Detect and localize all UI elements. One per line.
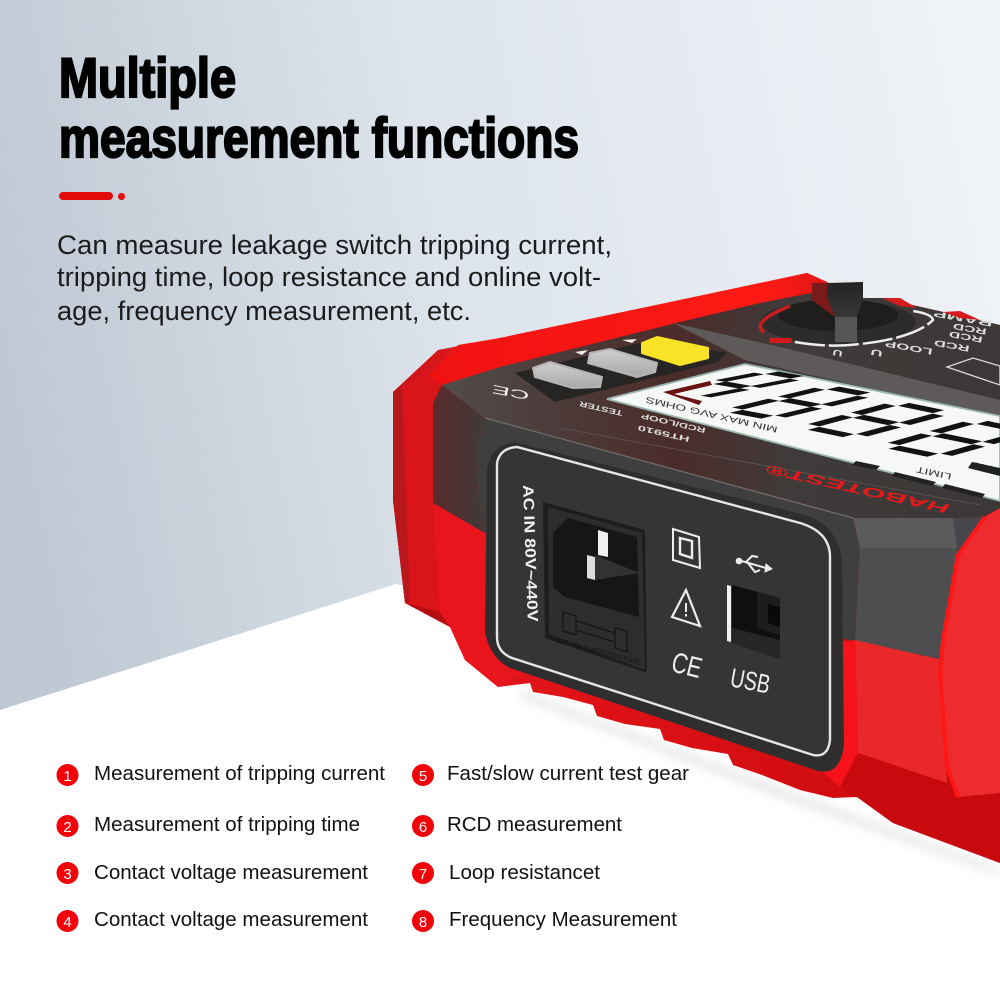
list labels: Loop resistancet (449, 861, 600, 884)
description text (57, 230, 612, 326)
product: multifunction tester device (393, 273, 1000, 875)
list labels: Contact voltage measurement (94, 908, 368, 931)
auto key outline (947, 358, 1000, 385)
CE mark top: CE (491, 382, 531, 403)
dial labels (832, 308, 993, 359)
list labels: Contact voltage measurement (94, 861, 368, 884)
model label (578, 399, 706, 444)
LCD small labels: LIMIT (915, 465, 952, 482)
list labels: Measurement of tripping time (94, 813, 360, 836)
dial labels: RCD (933, 338, 970, 354)
CE mark: CE (668, 646, 705, 685)
red top edge (428, 273, 827, 385)
list labels: Frequency Measurement (449, 908, 677, 931)
seven-segment digits (671, 372, 1000, 457)
icon: double insulation square (673, 529, 700, 568)
icon: USB symbol (736, 556, 772, 572)
dial base (760, 300, 916, 344)
title (59, 46, 579, 169)
description text: tripping time, loop resistance and online volt- (57, 262, 601, 292)
grey button 2 (588, 349, 657, 377)
white floor (0, 584, 1000, 1000)
list labels: Measurement of tripping current (94, 762, 385, 785)
LCD small labels: AC (971, 460, 992, 474)
dial labels: U (832, 347, 843, 359)
badge numbers: 3 (63, 866, 72, 883)
description text: Can measure leakage switch tripping current, (57, 230, 612, 260)
device red body (393, 273, 1000, 863)
icon: warning triangle (672, 590, 700, 626)
left red facets (393, 372, 442, 612)
badge numbers (63, 768, 427, 931)
dial knob (827, 282, 863, 342)
red corner tabs (882, 298, 917, 308)
right grey bevel (853, 517, 985, 660)
front face (475, 418, 860, 642)
badge numbers: 6 (419, 819, 427, 836)
fuse symbol (563, 612, 627, 652)
red accent divider (59, 192, 125, 200)
feature list (56, 762, 689, 932)
rotary dial (760, 282, 1000, 385)
yellow button (642, 337, 708, 365)
fuse note text: USE ONLY WITH 250V FUSE (554, 637, 642, 667)
list labels: RCD measurement (447, 813, 622, 836)
model label: HT5910 (637, 423, 690, 444)
dial labels: RCD (948, 329, 983, 345)
numbered badges (56, 764, 434, 932)
model label: TESTER (578, 399, 623, 418)
floor shadow (520, 690, 1000, 875)
dial scale arc (795, 311, 933, 346)
lower dark panel surround (485, 442, 844, 772)
button tray (515, 343, 727, 402)
list labels: Fast/slow current test gear (447, 762, 689, 785)
LCD display (607, 364, 1000, 501)
LCD small labels (644, 395, 992, 482)
list labels (94, 762, 689, 931)
dial labels: RCD (952, 321, 987, 337)
top surface (442, 290, 1000, 518)
red lower front (823, 640, 1000, 863)
dial labels: LOOP (884, 339, 933, 357)
grey strip above display (673, 323, 1000, 418)
white panel outline (497, 447, 830, 755)
LCD small labels: MIN MAX AVG OHMS (644, 395, 778, 435)
title: measurement functions (59, 106, 579, 169)
badge numbers: 4 (63, 914, 72, 931)
power socket module (543, 502, 647, 673)
small triangles (622, 339, 637, 343)
badge numbers: 2 (63, 819, 72, 836)
badge numbers: 1 (63, 768, 72, 785)
badge numbers: 7 (419, 866, 427, 883)
badge numbers: 8 (419, 914, 427, 931)
model label: RCD/LOOP (640, 411, 706, 435)
dial labels: RAMP (932, 308, 993, 329)
grey button 1 (533, 362, 602, 388)
red left lower front (433, 503, 523, 687)
knob shade (812, 283, 835, 317)
description text: age, frequency measurement, etc. (57, 296, 471, 326)
USB port (727, 585, 780, 659)
brand label: HABOTEST® (764, 461, 951, 517)
AC input label: AC IN 80V~440V (519, 485, 541, 622)
USB label: USB (728, 664, 773, 700)
dial labels: U (870, 347, 883, 359)
badge numbers: 5 (419, 768, 427, 785)
left face bevel (433, 385, 485, 532)
red right corner (940, 508, 1000, 797)
title: Multiple (59, 46, 236, 109)
